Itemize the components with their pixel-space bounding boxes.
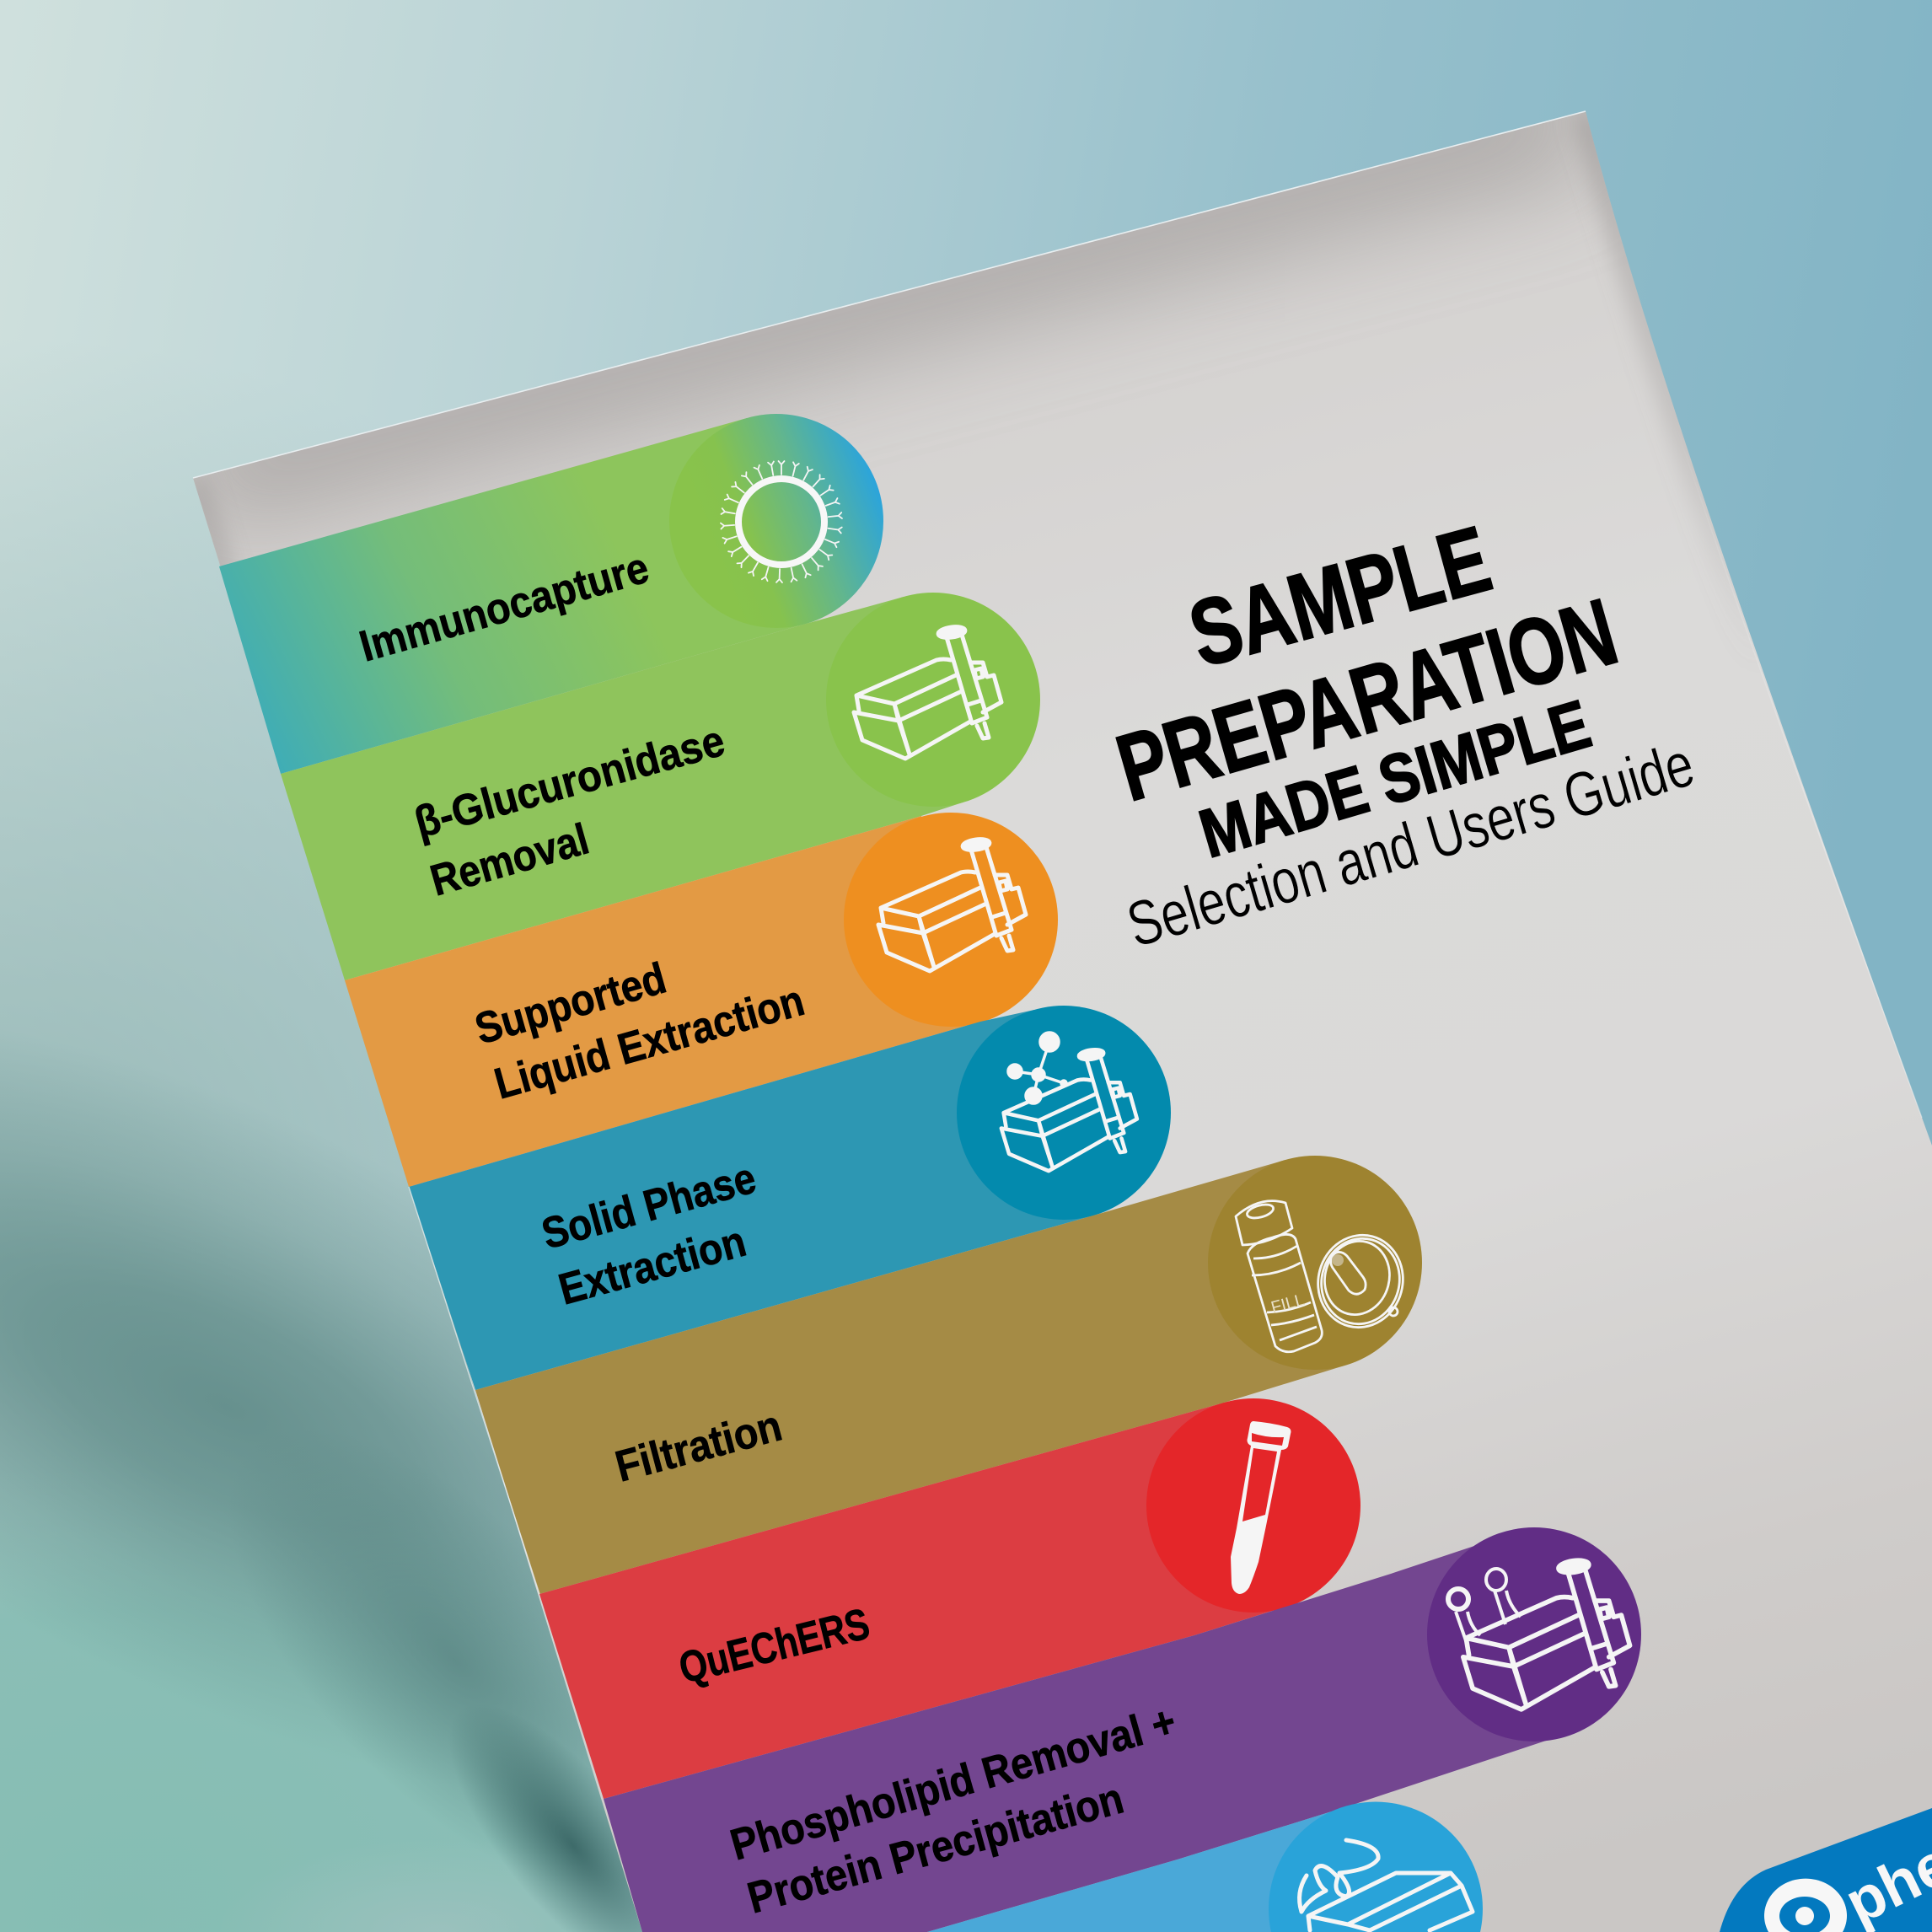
icon circle: centrifuge tube (1146, 1398, 1360, 1613)
band: light blue, cropped at page bottom (927, 1802, 1483, 1932)
label: Phospholipid Removal + (725, 1697, 1181, 1870)
label: Protein Precipitation (743, 1774, 1129, 1924)
label (410, 716, 730, 906)
icon circle: virus (669, 414, 883, 628)
label: Liquid Extraction (490, 976, 809, 1109)
band body (409, 1010, 1093, 1390)
title: SAMPLE: SAMPLE (1179, 507, 1501, 687)
label: Extraction (554, 1217, 751, 1315)
icon circle: cartridge and syringe (844, 813, 1058, 1027)
band: Supported Liquid Extraction (345, 813, 1058, 1187)
label: Filtration (610, 1402, 786, 1492)
band body (927, 1806, 1382, 1932)
label: Supported (470, 954, 672, 1055)
icon circle: vial and syringe filter: FILL (1269, 1291, 1307, 1318)
subtitle: Selection and Users Guide (1119, 728, 1702, 960)
band body (219, 418, 806, 774)
band body (539, 1403, 1283, 1799)
band body (345, 816, 980, 1187)
label (537, 1154, 761, 1315)
band body (604, 1536, 1559, 1932)
band: Phospholipid Removal + Protein Precipitation (604, 1527, 1641, 1932)
paper edge highlight (409, 1187, 539, 1594)
band body (281, 597, 963, 980)
band: Solid Phase Extraction (409, 1006, 1171, 1390)
icon circle: cartridge with squiggle (1269, 1802, 1483, 1932)
title block (1106, 507, 1702, 960)
logo: blue tab with brand mark (1720, 1808, 1932, 1932)
label: Removal (425, 814, 594, 906)
label: QuEChERS (674, 1599, 874, 1693)
icon circle: molecule, cartridge and syringe (957, 1006, 1171, 1220)
title: PREPARATION: PREPARATION (1106, 578, 1628, 821)
label: Immunocapture (354, 544, 654, 672)
icon circle: vial and syringe filter (1208, 1156, 1422, 1370)
label (725, 1697, 1181, 1924)
band: beta-Glucuronidase Removal (281, 593, 1040, 980)
icon circle: cartridge and syringe (826, 593, 1040, 807)
band: Immunocapture (219, 414, 883, 774)
band: QuEChERS (539, 1398, 1360, 1799)
band body (475, 1160, 1344, 1594)
label: β-Glucuronidase (410, 716, 730, 848)
title: MADE SIMPLE: MADE SIMPLE (1192, 686, 1599, 872)
label: Solid Phase (537, 1154, 761, 1259)
band: Filtration (475, 1156, 1422, 1594)
icon circle: phospholipid cartridge and syringe (1427, 1527, 1641, 1741)
